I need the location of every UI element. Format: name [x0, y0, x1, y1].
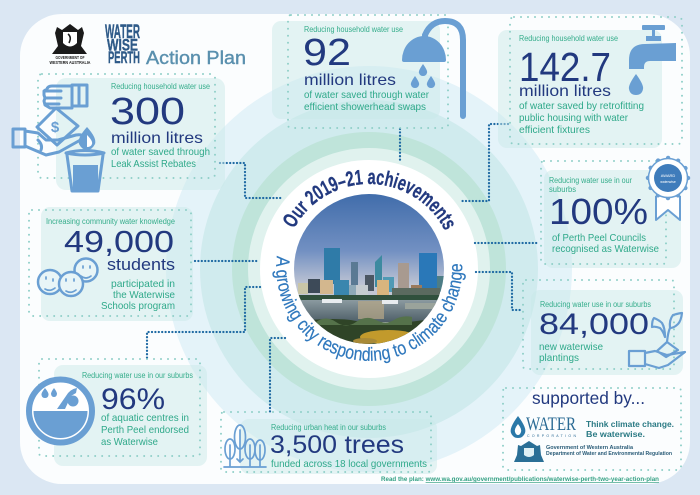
- circular subheading: growing city: A growing city responding to climate change: [272, 256, 466, 364]
- department name: Government of Western Australia: [546, 445, 634, 451]
- icon: smiling faces: [38, 258, 98, 296]
- logo: government of Western Australia crest: WESTERN AUSTRALIA: [50, 60, 91, 65]
- label: Reducing water use in our suburbs: [82, 371, 193, 380]
- number: 96%: [101, 383, 165, 416]
- description: recognised as Waterwise: [552, 244, 659, 255]
- central city photo: [294, 194, 444, 344]
- icon: award ribbon: waterwise: [660, 180, 676, 184]
- description: Leak Assist Rebates: [111, 159, 196, 170]
- number: 92: [303, 32, 351, 74]
- logo: Water Wise Perth: PERTH: [108, 48, 140, 67]
- number: 300: [110, 91, 185, 133]
- icon: swimmer in pool: [29, 380, 92, 442]
- description: the Waterwise: [113, 290, 175, 301]
- panel: 49,000 students: [29, 207, 193, 321]
- description: efficient fixtures: [519, 125, 590, 136]
- label: Reducing household water use: [519, 34, 619, 43]
- logo: Water Corporation: WATER: [526, 415, 577, 435]
- panel: 96% aquatic centres: [29, 359, 207, 466]
- number: 3,500 trees: [270, 431, 404, 459]
- description: [111, 147, 210, 170]
- description: [552, 233, 659, 255]
- panel: 84,000 plantings: [523, 280, 685, 375]
- unit: million litres: [519, 83, 611, 100]
- logo: Water Corporation: CORPORATION: [527, 434, 576, 438]
- logo: government of Western Australia crest: GOVERNMENT OF: [56, 55, 85, 60]
- icon: tap: [629, 25, 676, 95]
- label: Reducing water use in our: [549, 176, 632, 185]
- slogan: Think climate change.: [586, 419, 674, 429]
- slogan: Be waterwise.: [586, 429, 645, 439]
- icon: hands with money bag and glass: [13, 85, 104, 191]
- circular heading: achievements: Our 2019–21 achievements: [283, 170, 454, 230]
- icon: hands with money bag and glass: $: [51, 119, 60, 136]
- description: of Perth Peel Councils: [552, 233, 646, 244]
- logo: department crest: [514, 441, 544, 462]
- description: public housing with water: [519, 113, 629, 124]
- description: [519, 101, 644, 136]
- logo: Water Wise Perth: WATER: [105, 22, 140, 43]
- heading: supported by...: [532, 388, 645, 408]
- unit: million litres: [304, 72, 396, 89]
- number: 100%: [549, 191, 648, 232]
- description: of aquatic centres in: [101, 413, 189, 424]
- slogan: [586, 419, 674, 439]
- description: [539, 342, 603, 364]
- panel: 100% of councils: [541, 158, 688, 268]
- panel: 92 million litres: [272, 15, 463, 128]
- panel: supported by: [503, 388, 681, 470]
- number: 84,000: [539, 308, 649, 341]
- panel: 100% of councils: suburbs: [549, 185, 576, 194]
- department name: [546, 445, 672, 457]
- description: plantings: [539, 353, 579, 364]
- logo: Water Wise Perth: [105, 22, 140, 67]
- icon: hand holding plant: [629, 313, 685, 368]
- title: Action Plan: Action Plan: [146, 47, 246, 68]
- label: Reducing household water use: [304, 25, 404, 34]
- department name: Department of Water and Environmental Regulation: [546, 451, 672, 457]
- number: 142.7: [519, 44, 611, 90]
- panel: 300 million litres: [13, 74, 225, 191]
- description: as Waterwise: [101, 437, 158, 448]
- panel: 3,500 trees: [221, 412, 437, 474]
- description: [101, 413, 189, 448]
- connector lines: [147, 124, 538, 412]
- logo: Water Corporation: [511, 415, 577, 438]
- footer link: Read the plan: www.wa.gov.au/government/publications/waterwise-perth-two-year-action-plan: [381, 476, 659, 483]
- label: Increasing community water knowledge: [46, 217, 176, 226]
- description: efficient showerhead swaps: [304, 102, 426, 113]
- logo: Water Wise Perth: WISE: [107, 36, 138, 54]
- label: Reducing water use in our suburbs: [540, 300, 651, 309]
- description: Perth Peel endorsed: [101, 425, 189, 436]
- unit: million litres: [111, 130, 203, 147]
- description: [101, 279, 175, 312]
- logo: government of Western Australia crest: [50, 24, 91, 65]
- description: of water saved by retrofitting: [519, 101, 644, 112]
- description: funded across 18 local governments: [271, 459, 427, 470]
- icon: award ribbon: [648, 158, 688, 220]
- description: [304, 90, 430, 113]
- icon: award ribbon: AWARD: [661, 173, 675, 178]
- number: 49,000: [64, 224, 174, 259]
- panel: 142.7 million litres: [498, 17, 682, 148]
- description: participated in: [111, 279, 175, 290]
- concentric water ripples: [166, 66, 572, 472]
- description: Schools program: [101, 301, 175, 312]
- label: Reducing urban heat in our suburbs: [271, 423, 386, 432]
- label: Reducing household water use: [111, 82, 211, 91]
- description: of water saved through: [111, 147, 210, 158]
- icon: trees: [224, 425, 266, 467]
- description: of water saved through water: [304, 90, 430, 101]
- icon: shower: [402, 21, 463, 116]
- description: new waterwise: [539, 342, 603, 353]
- unit: students: [107, 256, 175, 274]
